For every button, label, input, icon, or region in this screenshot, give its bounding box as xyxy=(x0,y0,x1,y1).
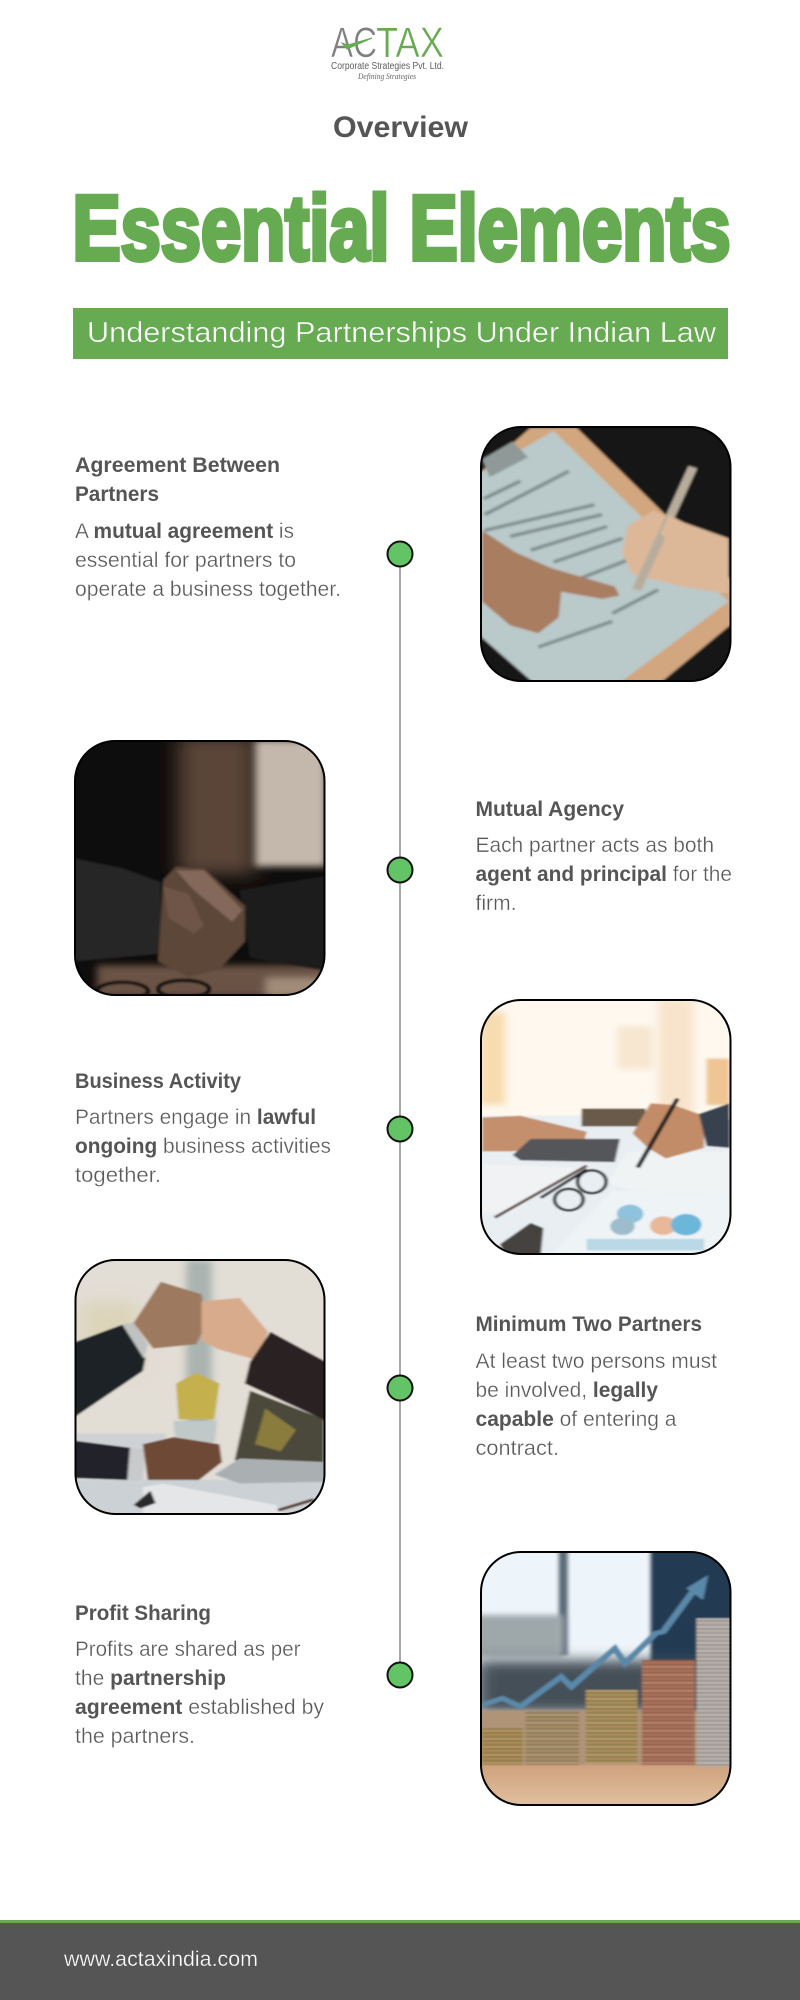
heading: Business Activity xyxy=(75,1069,241,1093)
body text: Partners engage in lawful xyxy=(75,1105,316,1129)
step 4: Minimum Two Partners xyxy=(71,1259,717,1519)
subtitle text: Understanding Partnerships Under Indian Law xyxy=(87,317,717,349)
logo: ACTAX xyxy=(331,19,444,81)
footer bar xyxy=(0,1920,800,2000)
body text: Profits are shared as per xyxy=(75,1637,300,1661)
photo: handshake xyxy=(71,736,327,1000)
photo: fist bump xyxy=(71,1259,327,1519)
body text: capable of entering a xyxy=(476,1407,677,1431)
body text: ongoing business activities xyxy=(75,1134,331,1158)
body text xyxy=(75,1105,331,1187)
timeline marker xyxy=(388,1376,412,1400)
heading: Partners xyxy=(75,482,159,506)
footer website: www.actaxindia.com xyxy=(63,1948,258,1971)
step 5: Profit Sharing xyxy=(75,1548,735,1808)
body text: A mutual agreement is xyxy=(75,519,294,543)
body text: the partners. xyxy=(75,1724,195,1748)
subtitle ribbon xyxy=(73,308,728,359)
body text xyxy=(476,1349,717,1460)
photo: signing agreement on clipboard xyxy=(474,424,735,685)
body text: agreement established by xyxy=(75,1695,324,1719)
heading xyxy=(75,453,280,506)
overview label: Overview xyxy=(333,111,469,144)
heading: Mutual Agency xyxy=(476,797,624,821)
body text: agent and principal for the xyxy=(476,862,732,886)
body text: firm. xyxy=(476,891,516,915)
timeline marker xyxy=(388,1662,412,1688)
body text: operate a business together. xyxy=(75,577,341,601)
timeline marker xyxy=(388,1116,412,1142)
body text: contract. xyxy=(476,1436,559,1460)
body text: be involved, legally xyxy=(476,1378,658,1402)
body text: the partnership xyxy=(75,1666,226,1690)
photo: financial review at desk xyxy=(477,998,732,1259)
timeline marker xyxy=(388,858,412,882)
heading: Minimum Two Partners xyxy=(476,1312,702,1336)
heading: Agreement Between xyxy=(75,453,280,477)
logo mark TAX: TAX xyxy=(376,19,444,67)
body text xyxy=(75,519,341,601)
logo tagline strategies: Defining Strategies xyxy=(357,72,416,81)
step 3: Business Activity xyxy=(75,998,732,1259)
logo tagline company: Corporate Strategies Pvt. Ltd. xyxy=(331,61,444,72)
step 1: Agreement Between Partners xyxy=(75,424,735,685)
step 2: Mutual Agency xyxy=(71,736,732,1000)
heading: Profit Sharing xyxy=(75,1601,211,1625)
timeline marker xyxy=(388,542,412,566)
timeline line xyxy=(399,554,401,1675)
photo: coin stacks with rising arrow xyxy=(474,1548,735,1808)
logo check mark xyxy=(342,38,372,49)
body text xyxy=(75,1637,324,1748)
body text: At least two persons must xyxy=(476,1349,717,1373)
body text: Each partner acts as both xyxy=(476,833,714,857)
logo mark AC: AC xyxy=(331,19,377,67)
body text: essential for partners to xyxy=(75,548,296,572)
body text xyxy=(476,833,732,915)
body text: together. xyxy=(75,1163,161,1187)
